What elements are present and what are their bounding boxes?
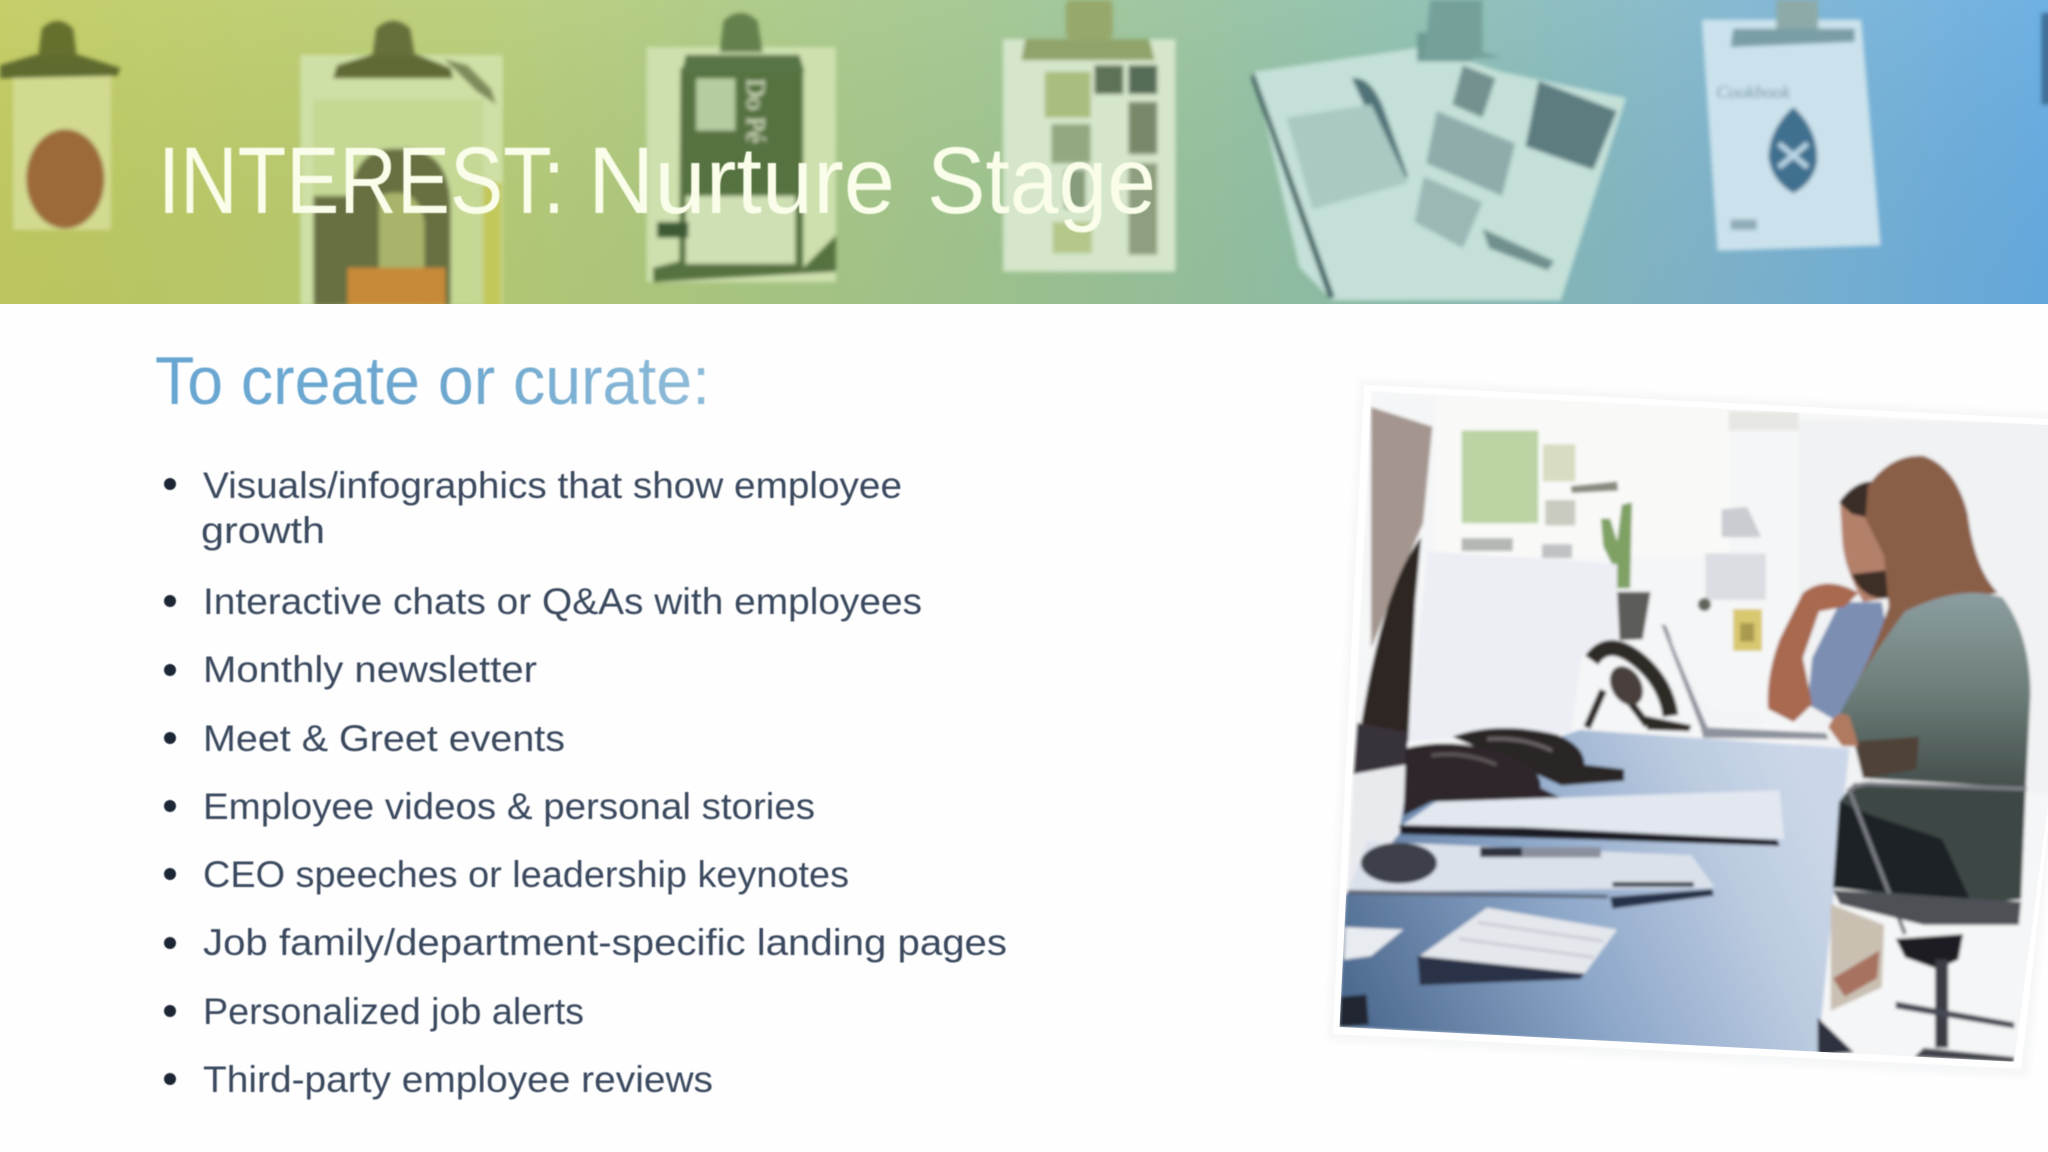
office photo, tilted with white frame — [1327, 379, 2048, 1078]
clipboard 6 — [1702, 0, 2048, 251]
clipboard 3: Do Pé — [741, 78, 770, 143]
woman torso and trousers — [1833, 783, 2026, 904]
title: Nurture — [588, 128, 895, 234]
desk — [1339, 730, 1849, 1055]
leg patterned — [1831, 904, 1884, 1011]
room background — [1340, 391, 2048, 1066]
list item 3: Monthly newsletter — [203, 649, 537, 690]
title: Stage — [927, 128, 1156, 234]
title — [158, 128, 1156, 234]
window — [1436, 398, 1729, 556]
clipboard 4 — [1003, 0, 1175, 272]
hand — [1828, 714, 1859, 746]
list item 1 — [164, 465, 902, 551]
list item 9: Third-party employee reviews — [203, 1059, 713, 1100]
photo frame shadow — [1327, 379, 2048, 1078]
list item 4: Meet & Greet events — [203, 718, 565, 759]
heading: To create or curate: To create or curate: — [155, 343, 710, 419]
header banner with clipboards photo — [0, 0, 2048, 306]
book of photos — [1251, 0, 1626, 300]
woman shirt — [1840, 593, 2030, 788]
plant pot — [1617, 592, 1651, 640]
list item 1: growth — [201, 510, 325, 551]
banner photo: clipped magazines on wall — [0, 0, 2048, 306]
mouse — [1361, 843, 1437, 884]
white divider — [1408, 551, 1617, 741]
cactus — [1601, 502, 1632, 588]
clipboard 1 — [0, 21, 120, 230]
laptop — [1661, 624, 1828, 739]
keyboard — [1420, 908, 1617, 974]
documents on desk — [1399, 790, 1784, 839]
clipboard 3 — [647, 13, 836, 282]
list item 7: Job family/department-specific landing pages — [203, 922, 1007, 963]
man — [1838, 502, 1888, 604]
list item 1: Visuals/infographics that show employee — [203, 465, 902, 506]
list item 5: Employee videos & personal stories — [203, 786, 815, 827]
bullet list — [164, 465, 1007, 1100]
chair — [1849, 784, 2027, 934]
phones on desk — [1452, 728, 1624, 786]
lamp — [1571, 481, 1618, 493]
wall notes — [1722, 507, 1761, 537]
list item 6: CEO speeches or leadership keynotes — [203, 854, 849, 895]
clipboard 2 — [300, 21, 503, 306]
left partition — [1371, 407, 1432, 649]
list item 2: Interactive chats or Q&As with employees — [203, 581, 922, 622]
list item 8: Personalized job alerts — [203, 991, 584, 1032]
clipboard 6: Cookbook — [1716, 82, 1791, 102]
far desk phone — [1587, 648, 1691, 731]
title: INTEREST: — [158, 128, 565, 234]
woman hair — [1859, 454, 1999, 679]
pen — [1610, 889, 1714, 909]
